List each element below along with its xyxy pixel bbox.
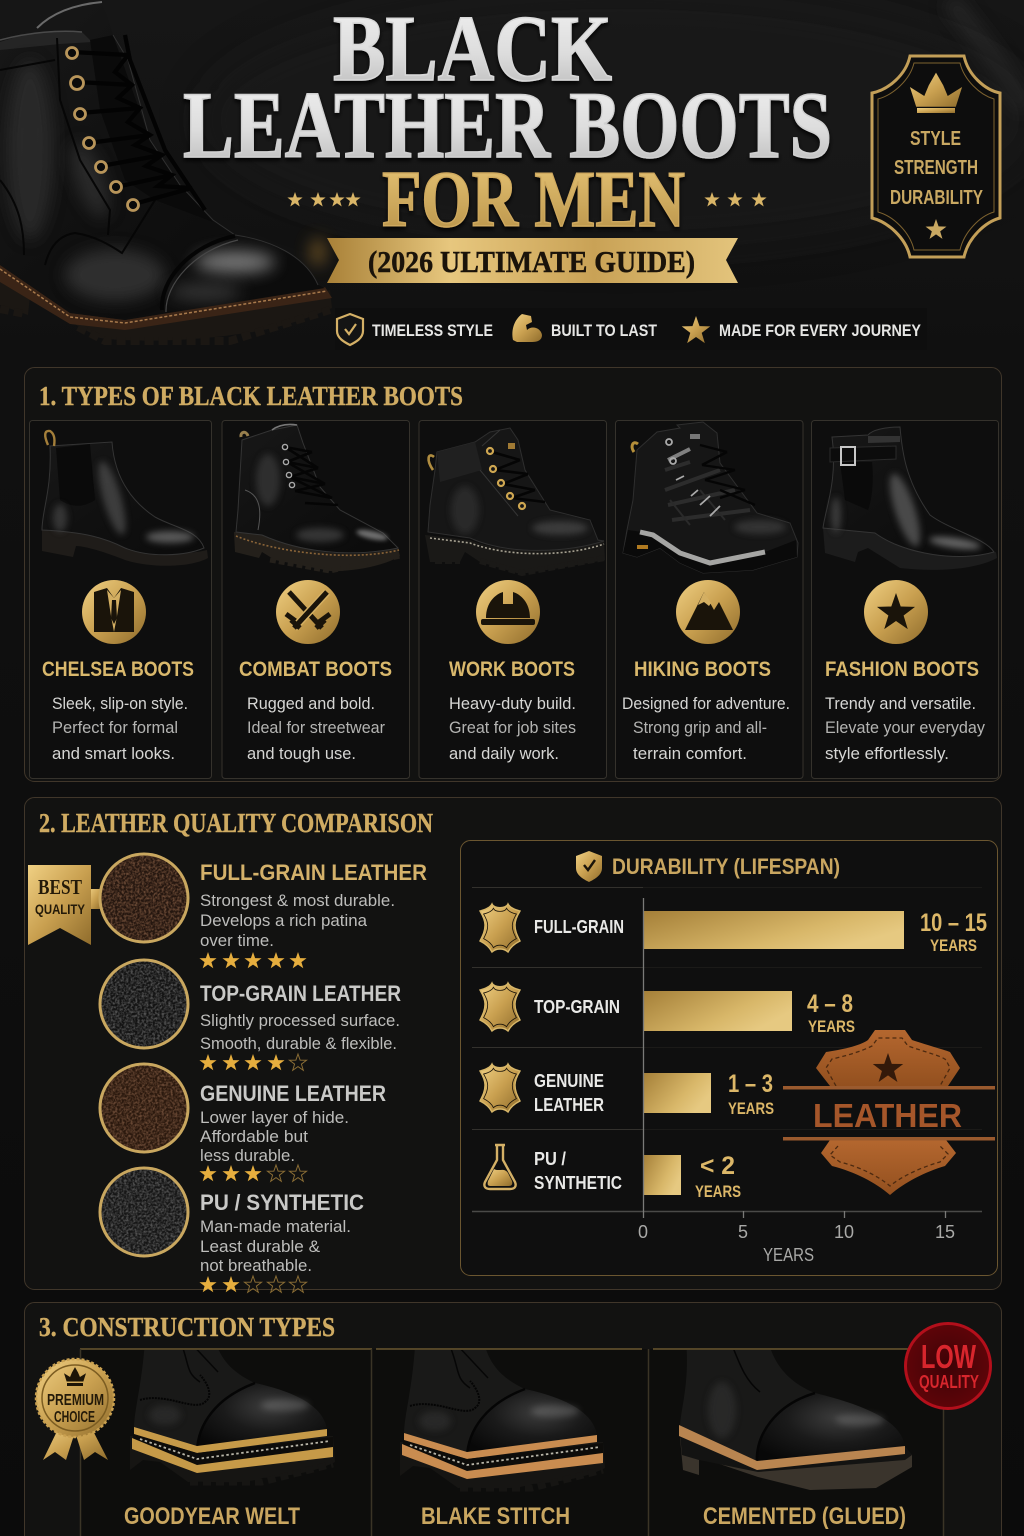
eyelets bbox=[66, 48, 138, 210]
card: blake stitch: BLAKE STITCH bbox=[421, 1503, 570, 1530]
title: FOR MEN bbox=[382, 156, 685, 244]
axis: 0 bbox=[638, 1222, 648, 1242]
crest badge: DURABILITY bbox=[890, 187, 984, 209]
bar chart: durability: DURABILITY (LIFESPAN) bbox=[612, 854, 840, 879]
item: top grain: Smooth, durable & flexible. bbox=[200, 1034, 397, 1053]
bar chart: durability bbox=[460, 840, 998, 1276]
tagline bar: BUILT TO LAST bbox=[551, 321, 658, 340]
chelsea boot image bbox=[42, 431, 208, 566]
premium choice badge: PREMIUM bbox=[47, 1392, 104, 1409]
subtitle ribbon bbox=[327, 238, 738, 283]
tagline bar: TIMELESS STYLE bbox=[372, 321, 493, 340]
card: goodyear welt: GOODYEAR WELT bbox=[124, 1503, 300, 1530]
leather patch: LEATHER bbox=[813, 1097, 962, 1134]
crest badge: STRENGTH bbox=[894, 157, 978, 179]
panel: construction types bbox=[24, 1302, 1002, 1536]
icon: suit bbox=[82, 580, 146, 644]
premium choice badge: CHOICE bbox=[54, 1409, 95, 1426]
card: work bbox=[419, 420, 606, 778]
item: full grain: Develops a rich patina bbox=[200, 911, 368, 930]
tagline bar bbox=[335, 308, 927, 350]
heading: 1. TYPES OF BLACK LEATHER BOOTS bbox=[39, 381, 463, 411]
icon: mountains bbox=[676, 580, 740, 644]
icon: crossed swords bbox=[276, 580, 340, 644]
card: hiking: terrain comfort. bbox=[633, 744, 747, 763]
row: synthetic: SYNTHETIC bbox=[534, 1173, 622, 1193]
row: synthetic: YEARS bbox=[695, 1182, 741, 1201]
item: synthetic: Man-made material. bbox=[200, 1217, 351, 1236]
card: hiking bbox=[616, 420, 803, 778]
sole bbox=[0, 272, 332, 341]
icon: flexed arm bbox=[512, 314, 542, 342]
rating stars bbox=[199, 952, 307, 968]
title: BLACK bbox=[333, 0, 612, 101]
upper bbox=[0, 0, 325, 320]
heading: 2. LEATHER QUALITY COMPARISON bbox=[39, 808, 433, 838]
icon: star bbox=[926, 219, 946, 239]
axis bbox=[638, 898, 955, 1265]
axis: 5 bbox=[738, 1222, 748, 1242]
row: genuine: 1 – 3 bbox=[728, 1070, 773, 1098]
card: work: Great for job sites bbox=[449, 718, 576, 737]
icon: hide bbox=[480, 1064, 520, 1112]
title: LEATHER BOOTS bbox=[183, 72, 832, 178]
icon: hard hat bbox=[476, 580, 540, 644]
icon: shield bbox=[576, 851, 602, 882]
tagline bar: MADE FOR EVERY JOURNEY bbox=[719, 321, 922, 340]
row: full grain bbox=[480, 904, 987, 955]
row: genuine bbox=[480, 1064, 774, 1118]
hiking boot image bbox=[623, 422, 798, 573]
card: combat: Ideal for streetwear bbox=[247, 718, 385, 737]
card: fashion: Elevate your everyday bbox=[825, 718, 985, 737]
card: chelsea: and smart looks. bbox=[52, 744, 175, 763]
row: synthetic: PU / bbox=[534, 1149, 566, 1169]
crest badge bbox=[872, 56, 1000, 257]
fashion boot image bbox=[823, 427, 997, 570]
icon: flask bbox=[484, 1145, 516, 1189]
axis: 15 bbox=[935, 1222, 955, 1242]
row: top grain: 4 – 8 bbox=[807, 990, 853, 1018]
rating stars bbox=[199, 1165, 307, 1181]
rating stars bbox=[199, 1054, 307, 1070]
header boot illustration bbox=[0, 0, 332, 341]
item: top grain: Slightly processed surface. bbox=[200, 1011, 400, 1030]
card: hiking: Strong grip and all- bbox=[633, 718, 767, 737]
goodyear boot image bbox=[130, 1340, 335, 1482]
panel: types of boots bbox=[24, 368, 1002, 782]
card: fashion: Trendy and versatile. bbox=[825, 694, 976, 713]
item: synthetic bbox=[100, 1168, 364, 1292]
item: genuine: GENUINE LEATHER bbox=[200, 1081, 386, 1106]
row: synthetic: < 2 bbox=[700, 1152, 735, 1180]
icon: shield check bbox=[337, 314, 363, 345]
row: top grain: TOP-GRAIN bbox=[534, 997, 620, 1017]
leather patch bbox=[783, 1030, 995, 1195]
item: genuine: Affordable but bbox=[200, 1127, 308, 1146]
item: genuine bbox=[100, 1064, 386, 1181]
low quality badge bbox=[906, 1324, 990, 1408]
card: chelsea: CHELSEA BOOTS bbox=[42, 658, 194, 681]
item: full grain: over time. bbox=[200, 931, 274, 950]
sheen bbox=[0, 31, 275, 301]
laces bbox=[72, 35, 205, 210]
card: fashion: style effortlessly. bbox=[825, 744, 949, 763]
item: genuine: less durable. bbox=[200, 1146, 295, 1165]
card: blake stitch bbox=[400, 1346, 605, 1530]
rating stars bbox=[199, 1276, 307, 1292]
decorative stars left bbox=[287, 192, 361, 206]
crest badge: STYLE bbox=[910, 128, 961, 150]
row: full grain: 10 – 15 bbox=[920, 909, 987, 937]
title bbox=[183, 0, 832, 244]
best quality ribbon: QUALITY bbox=[35, 901, 86, 917]
card: combat: Rugged and bold. bbox=[247, 694, 375, 713]
item: synthetic: not breathable. bbox=[200, 1256, 312, 1275]
card: chelsea bbox=[30, 420, 212, 778]
card: combat: and tough use. bbox=[247, 744, 356, 763]
card: fashion bbox=[812, 420, 998, 778]
card: cemented bbox=[679, 1340, 912, 1530]
work boot image bbox=[425, 428, 605, 574]
row: full grain: FULL-GRAIN bbox=[534, 917, 624, 937]
decorative stars right bbox=[704, 192, 767, 206]
axis: 10 bbox=[834, 1222, 854, 1242]
panel: leather quality bbox=[24, 798, 1002, 1292]
item: top grain: TOP-GRAIN LEATHER bbox=[200, 981, 401, 1006]
heading: 3. CONSTRUCTION TYPES bbox=[39, 1312, 335, 1342]
low quality badge: LOW bbox=[921, 1338, 977, 1375]
row: top grain: YEARS bbox=[808, 1017, 855, 1036]
welt bbox=[0, 265, 332, 330]
axis: YEARS bbox=[763, 1245, 814, 1265]
seams bbox=[0, 38, 155, 265]
card: hiking: Designed for adventure. bbox=[622, 694, 790, 713]
icon: star bbox=[864, 580, 928, 644]
card: chelsea: Sleek, slip-on style. bbox=[52, 694, 188, 713]
icon: crown bbox=[910, 73, 962, 113]
card: hiking: HIKING BOOTS bbox=[634, 658, 771, 681]
icon: hide bbox=[480, 983, 520, 1031]
row: synthetic bbox=[484, 1145, 741, 1201]
subtitle ribbon: (2026 ULTIMATE GUIDE) bbox=[368, 244, 695, 279]
card: work: WORK BOOTS bbox=[449, 658, 575, 681]
row: genuine: LEATHER bbox=[534, 1095, 604, 1115]
item: top grain bbox=[100, 960, 401, 1070]
item: genuine: Lower layer of hide. bbox=[200, 1108, 349, 1127]
cemented boot image bbox=[679, 1340, 912, 1490]
card: cemented: CEMENTED (GLUED) bbox=[703, 1503, 906, 1530]
card: goodyear welt bbox=[124, 1340, 335, 1530]
combat boot image bbox=[234, 425, 400, 571]
best quality ribbon: BEST bbox=[38, 875, 82, 899]
item: synthetic: PU / SYNTHETIC bbox=[200, 1190, 364, 1215]
card: combat bbox=[222, 420, 410, 778]
row: genuine: YEARS bbox=[728, 1099, 774, 1118]
card: chelsea: Perfect for formal bbox=[52, 718, 178, 737]
item: full grain: Strongest & most durable. bbox=[200, 891, 395, 910]
row: full grain: YEARS bbox=[930, 936, 977, 955]
card: work: and daily work. bbox=[449, 744, 559, 763]
low quality badge: QUALITY bbox=[919, 1372, 979, 1392]
item: full grain bbox=[100, 854, 427, 968]
best quality ribbon bbox=[28, 865, 102, 945]
icon: star bbox=[682, 316, 710, 343]
premium choice badge bbox=[36, 1359, 114, 1460]
card: combat: COMBAT BOOTS bbox=[239, 658, 392, 681]
blake boot image bbox=[400, 1346, 605, 1488]
row: genuine: GENUINE bbox=[534, 1071, 604, 1091]
card: work: Heavy-duty build. bbox=[449, 694, 576, 713]
item: synthetic: Least durable & bbox=[200, 1237, 321, 1256]
icon: hide bbox=[480, 904, 520, 952]
item: full grain: FULL-GRAIN LEATHER bbox=[200, 860, 427, 885]
card: fashion: FASHION BOOTS bbox=[825, 658, 979, 681]
row: top grain bbox=[480, 983, 855, 1036]
